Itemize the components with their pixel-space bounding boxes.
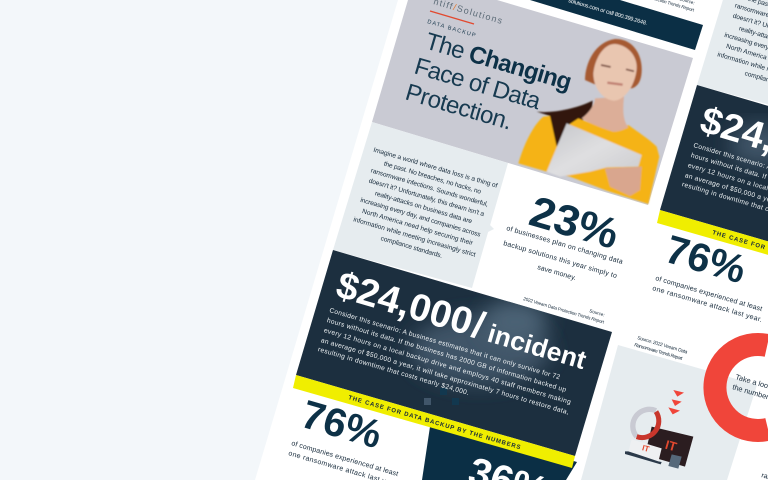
title: Protection. — [402, 79, 515, 136]
eyes and mouth — [601, 65, 611, 67]
stat caption — [502, 225, 624, 282]
yellow band heading: THE CASE FOR DATA BACKUP BY THE NUMBERS — [347, 395, 521, 451]
source note lower panel: Ransomware Trends Report — [633, 342, 684, 362]
dark tablet — [645, 427, 693, 467]
icon: devices with ransomware cycle: IT — [664, 438, 678, 454]
stat: 23%: 23% — [524, 188, 624, 259]
face — [593, 44, 637, 101]
icon: devices with ransomware cycle: IT — [641, 443, 651, 454]
intro paragraph: information while meeting increasingly strict — [352, 216, 476, 259]
stat caption: backup solutions this year simply to — [502, 240, 618, 280]
intro paragraph: compliance standards. — [380, 235, 443, 260]
stat caption: save money. — [536, 264, 577, 282]
source note: Source: — [589, 308, 605, 317]
donut caption — [731, 372, 768, 403]
source note top right — [613, 0, 695, 13]
intro paragraph: ransomware infections. Sounds wonderful, — [370, 168, 489, 209]
stat: 76% — [287, 392, 399, 480]
panel: intro text — [333, 122, 508, 288]
title: Face of Data — [411, 53, 544, 115]
second copy stat: 76%: one ransomware attack last year. — [651, 285, 763, 324]
headline figure: $24,000 — [331, 264, 478, 344]
intro paragraph: North America need help securing their — [361, 208, 474, 247]
phone — [668, 454, 682, 469]
scenario paragraph: hours without its data. If the business has 2000 GB of information backed up — [326, 317, 567, 394]
panel: dark cost block: incident — [484, 318, 590, 375]
source note lower panel: Source: 2022 Veeam Data — [636, 335, 688, 356]
stat: 23% — [502, 188, 624, 282]
icon: devices with ransomware cycle — [625, 390, 693, 469]
second copy stat: 76%: 76% — [660, 227, 751, 292]
second copy stat: 76%: of companies experienced at least — [654, 275, 763, 313]
intro paragraph: reality-attacks on business data are — [374, 190, 473, 225]
photo: woman holding laptop — [518, 39, 659, 204]
infographic preview canvas — [255, 0, 768, 480]
second copy yellow band — [657, 210, 768, 303]
cycle ring — [633, 409, 656, 437]
title — [402, 28, 575, 136]
scenario paragraph: Consider this scenario: A business estimates that it can only survive for 72 — [328, 307, 561, 381]
stat: 76%: 76% — [296, 392, 387, 457]
panel: dark cost block — [296, 250, 612, 456]
chart: donut ring — [715, 344, 768, 430]
panel: hero image background — [372, 0, 693, 205]
intro paragraph: the past. No breaches, no hacks, no — [383, 161, 482, 196]
panel: second copy dark cost block — [660, 85, 768, 242]
red accent rule — [430, 11, 474, 24]
intro paragraph: Imagine a world where data loss is a thing of — [372, 147, 498, 190]
stat caption: of companies experienced at least — [290, 440, 399, 478]
panel: second copy intro text — [697, 0, 768, 123]
stat caption: of businesses plan on changing data — [505, 225, 624, 266]
label: data backup: DATA BACKUP — [426, 19, 476, 39]
laptop — [628, 439, 662, 462]
white document sheet — [255, 0, 768, 480]
red arrows — [673, 390, 684, 397]
panel: illustration background — [581, 345, 757, 480]
source note: 2022 Veeam Data Protection Trends Report — [523, 296, 605, 325]
intro paragraph — [352, 147, 498, 260]
scenario paragraph: resulting in downtime that costs nearly $24,000. — [317, 346, 470, 397]
ponytail — [537, 101, 593, 147]
hair — [585, 39, 642, 88]
scenario paragraph: every 12 hours on a local backup drive and employs 40 staff members making — [323, 327, 572, 406]
neck — [582, 97, 628, 132]
panel: dark cost block: / — [467, 304, 490, 348]
second copy stat: 76% — [651, 227, 763, 324]
laptop — [547, 123, 642, 177]
intro paragraph: increasing every day, and companies across — [359, 197, 482, 239]
scenario paragraph: an average of $50,000 a year, it will take approximately 7 hours to restore data, — [320, 337, 570, 416]
hand — [605, 167, 642, 196]
intro paragraph: doesn't it? Unfortunately, this dream isn't a — [368, 178, 485, 218]
source note lower panel — [633, 335, 688, 362]
contact bar at the top — [530, 0, 703, 50]
yellow band heading — [293, 375, 575, 468]
yellow sweater — [518, 116, 659, 204]
navy 36% panel — [422, 420, 577, 480]
title: The Changing — [422, 28, 575, 96]
